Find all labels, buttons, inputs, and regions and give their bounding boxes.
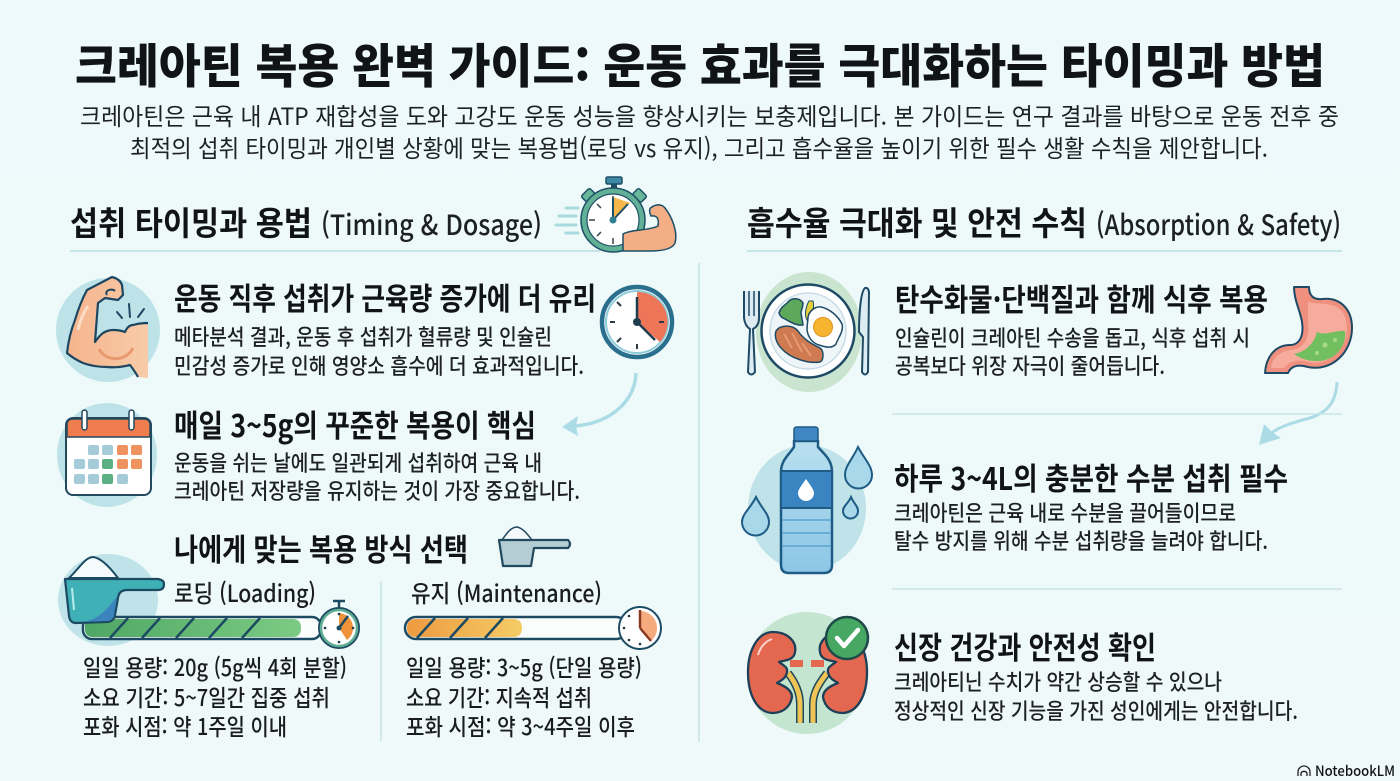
heading: 나에게 맞는 복용 방식 선택 — [174, 525, 468, 570]
watermark: NotebookLM: NotebookLM — [1315, 761, 1395, 781]
maintenance details: 소요 기간: 지속적 섭취 — [406, 679, 592, 713]
heading: 운동 직후 섭취가 근육량 증가에 더 유리 — [174, 274, 596, 319]
body text: 크레아틴은 근육 내로 수분을 끌어들이므로 — [894, 496, 1236, 528]
icon: stopwatch and muscle — [556, 177, 676, 252]
body text: 정상적인 신장 기능을 가진 성인에게는 안전합니다. — [894, 694, 1298, 726]
icon: stopwatch — [319, 601, 359, 648]
body text: 공복보다 위장 자극이 줄어듭니다. — [895, 349, 1165, 381]
heading: timing and dosage — [70, 197, 542, 245]
column: loading — [58, 554, 359, 742]
body text — [174, 446, 580, 506]
icon: calendar — [57, 403, 157, 507]
heading: absorption and safety — [747, 197, 1341, 245]
heading: 신장 건강과 안전성 확인 — [894, 623, 1156, 668]
body text: 크레아틴 저장량을 유지하는 것이 가장 중요합니다. — [174, 474, 580, 506]
label: 로딩 (Loading) — [174, 574, 316, 609]
intro text — [80, 97, 1339, 164]
maintenance details — [406, 649, 642, 742]
loading details: 일일 용량: 20g (5g씩 4회 분할) — [83, 649, 347, 683]
icon: clock — [619, 607, 661, 649]
heading: absorption and safety: (Absorption & Safety) — [1096, 204, 1341, 244]
heading: 탄수화물·단백질과 함께 식후 복용 — [895, 275, 1268, 320]
icon: clock — [602, 287, 672, 357]
label: 유지 (Maintenance) — [411, 574, 602, 609]
heading: timing and dosage: 섭취 타이밍과 용법 — [70, 197, 312, 245]
heading: absorption and safety: 흡수율 극대화 및 안전 수칙 — [747, 197, 1087, 245]
item: post-workout intake — [56, 274, 672, 382]
item: water intake — [742, 427, 1288, 573]
icon: small scoop — [499, 527, 570, 566]
title: 크레아틴 복용 완벽 가이드: 운동 효과를 극대화하는 타이밍과 방법 — [75, 28, 1325, 97]
icon: big scoop — [65, 557, 164, 623]
item: choose dosing method — [58, 525, 661, 742]
heading: 하루 3~4L의 충분한 수분 섭취 필수 — [894, 454, 1288, 499]
body text — [895, 321, 1250, 381]
icon: flexed arm — [56, 277, 160, 382]
loading details: 포화 시점: 약 1주일 이내 — [83, 708, 287, 742]
panel: timing and dosage — [56, 177, 676, 742]
body text: 운동을 쉬는 날에도 일관되게 섭취하여 근육 내 — [174, 446, 542, 478]
icon: plate with food — [744, 272, 869, 392]
scoop background — [58, 554, 158, 646]
body text — [894, 665, 1298, 726]
body text — [894, 496, 1268, 556]
intro text: 최적의 섭취 타이밍과 개인별 상황에 맞는 복용법(로딩 vs 유지), 그리고 흡수율을 높이기 위한 필수 생활 수칙을 제안합니다. — [130, 129, 1268, 164]
maintenance details: 일일 용량: 3~5g (단일 용량) — [406, 649, 642, 683]
body text: 인슐린이 크레아틴 수송을 돕고, 식후 섭취 시 — [895, 321, 1250, 353]
column: maintenance — [405, 574, 661, 742]
item: with meals — [744, 272, 1352, 392]
icon: kidneys with check — [747, 612, 868, 734]
body text: 민감성 증가로 인해 영양소 흡수에 더 효과적입니다. — [174, 349, 584, 381]
panel: absorption and safety — [742, 197, 1352, 734]
body text — [174, 320, 584, 381]
heading: 매일 3~5g의 꾸준한 복용이 핵심 — [174, 401, 536, 446]
progress bar: loading — [83, 617, 321, 639]
loading details — [83, 649, 347, 742]
body text: 탈수 방지를 위해 수분 섭취량을 늘려야 합니다. — [894, 524, 1268, 556]
body text: 크레아티닌 수치가 약간 상승할 수 있으나 — [894, 665, 1222, 697]
body text: 메타분석 결과, 운동 후 섭취가 혈류량 및 인슐린 — [174, 320, 552, 352]
heading: timing and dosage: (Timing & Dosage) — [321, 204, 542, 244]
item: daily dose — [57, 401, 580, 507]
arrow: clock to daily dose — [562, 373, 636, 436]
progress bar: maintenance — [405, 617, 627, 639]
icon: stomach — [1265, 287, 1352, 373]
intro text: 크레아틴은 근육 내 ATP 재합성을 도와 고강도 운동 성능을 향상시키는 보충제입니다. 본 가이드는 연구 결과를 바탕으로 운동 전후 중 — [80, 97, 1339, 132]
icon: water bottle and drops — [742, 427, 872, 573]
item: kidney safety — [747, 612, 1298, 734]
arrow: stomach to water — [1259, 382, 1337, 445]
loading details: 소요 기간: 5~7일간 집중 섭취 — [83, 679, 330, 713]
maintenance details: 포화 시점: 약 3~4주일 이후 — [406, 708, 635, 742]
